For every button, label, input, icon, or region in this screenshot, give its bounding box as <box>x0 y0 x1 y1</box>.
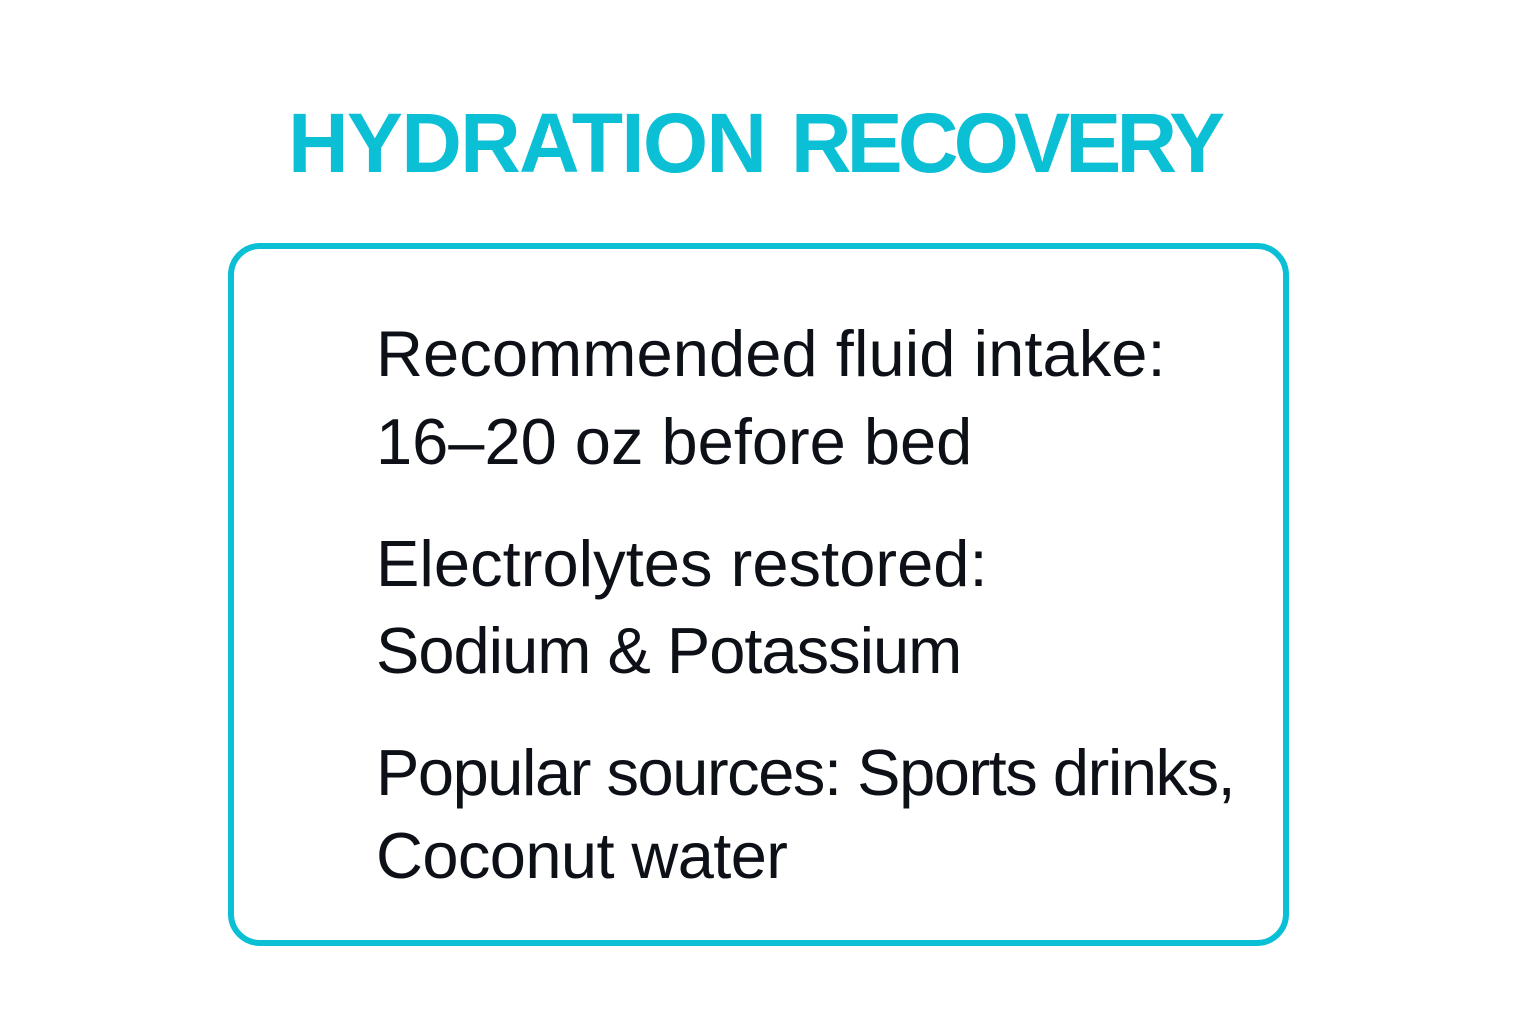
text block: electrolytes restored: Sodium & Potassium <box>376 614 961 687</box>
text block: electrolytes restored: Electrolytes restored: <box>376 527 988 600</box>
text block: recommended fluid intake <box>376 317 1166 478</box>
text block: popular sources: Popular sources: Sports drinks, <box>376 736 1234 809</box>
text block: popular sources: Coconut water <box>376 819 787 892</box>
title: HYDRATION RECOVERY <box>288 96 1220 190</box>
text block: recommended fluid intake: 16–20 oz before bed <box>376 405 972 478</box>
text block: recommended fluid intake: Recommended fluid intake: <box>376 317 1166 390</box>
text block: electrolytes restored <box>376 527 988 687</box>
text block: popular sources <box>376 736 1234 892</box>
panel: hydration facts <box>228 243 1289 946</box>
